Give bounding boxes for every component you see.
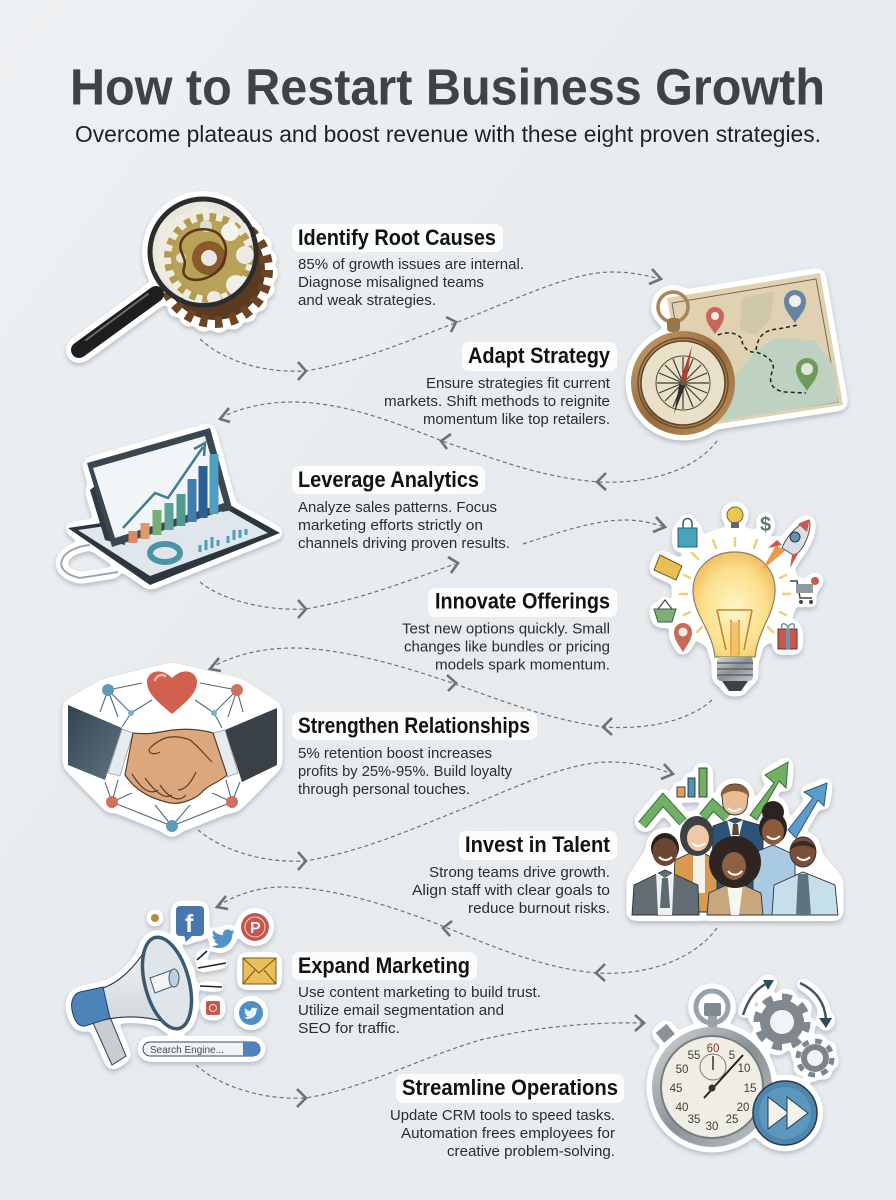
icon: location pin (674, 623, 692, 652)
icon: basket (654, 600, 676, 622)
heading and text: innovate offerings: changes like bundles or pricing (404, 638, 610, 656)
heading and text: expand marketing: Use content marketing to build trust. (298, 984, 541, 1001)
heading and text: innovate offerings: Test new options quickly. Small (402, 620, 610, 638)
heading and text: expand marketing (292, 952, 541, 1037)
icon: pinterest: P (250, 920, 261, 937)
search bar: Search Engine... (150, 1045, 224, 1056)
icon: gift (778, 624, 797, 649)
arrow: relationships to invest in talent (198, 762, 673, 870)
icon: team with growth arrows (632, 762, 838, 915)
arrow: adapt strategy to analytics (220, 402, 717, 490)
heading and text: leverage analytics: channels driving proven results. (298, 535, 510, 552)
heading and text: adapt strategy: Adapt Strategy (468, 343, 611, 368)
icon: rocket (762, 520, 810, 570)
heading and text: leverage analytics: marketing efforts strictly on (298, 517, 483, 534)
heading and text: streamline operations: Update CRM tools to speed tasks. (390, 1107, 615, 1124)
stopwatch dial numbers: 40 (676, 1102, 688, 1114)
icon: megaphone with social media (72, 906, 276, 1065)
stopwatch dial numbers: 20 (737, 1102, 749, 1114)
arrow: root causes to adapt strategy (200, 269, 661, 380)
heading and text: adapt strategy (384, 342, 617, 428)
icon: shopping cart (790, 577, 819, 604)
icon: red app badge (206, 1001, 220, 1015)
heading and text: identify root causes: and weak strategies. (298, 292, 436, 309)
icon: twitter bird (212, 929, 235, 948)
stopwatch dial numbers: 5 (729, 1050, 735, 1062)
arrow: expand marketing to streamline operations (196, 1015, 644, 1107)
heading and text: identify root causes: 85% of growth issues are internal. (298, 256, 524, 273)
heading and text: strengthen relationships (292, 712, 537, 798)
heading and text: innovate offerings (402, 588, 617, 674)
heading and text: innovate offerings: Innovate Offerings (435, 588, 610, 614)
arrow: analytics to innovate offerings (200, 517, 665, 618)
heading and text: identify root causes: Diagnose misaligned teams (298, 274, 484, 291)
heading and text: strengthen relationships: 5% retention boost increases (298, 745, 492, 762)
icon: coupon card (654, 555, 682, 580)
icon: pinterest (241, 913, 269, 941)
heading and text: strengthen relationships: through personal touches. (298, 781, 470, 798)
search bar (143, 1042, 260, 1056)
heading and text: leverage analytics: Analyze sales patterns. Focus (298, 499, 497, 516)
subtitle: Overcome plateaus and boost revenue with these eight proven strategies. (75, 121, 821, 147)
heading and text: adapt strategy: Ensure strategies fit current (426, 375, 611, 392)
stopwatch dial numbers: 10 (738, 1063, 750, 1075)
icon: small coin (151, 914, 159, 922)
heading and text: identify root causes (292, 224, 524, 309)
heading and text: streamline operations (390, 1074, 624, 1160)
stopwatch dial numbers: 60 (707, 1043, 719, 1055)
icon: stopwatch with gears and fast-forward (652, 980, 832, 1147)
icon: blue twitter badge (239, 1001, 263, 1025)
heading and text: leverage analytics (292, 466, 510, 552)
heading and text: streamline operations: creative problem-solving. (447, 1143, 615, 1160)
stopwatch dial numbers: 30 (706, 1121, 718, 1133)
heading and text: adapt strategy: momentum like top retailers. (423, 411, 610, 428)
stopwatch dial numbers (670, 1043, 756, 1133)
stopwatch dial numbers: 35 (688, 1114, 700, 1126)
heading and text: adapt strategy: markets. Shift methods to reignite (384, 393, 610, 410)
icon: dollar: $ (760, 514, 771, 536)
heading and text: invest in talent: Align staff with clear goals to (412, 882, 610, 899)
heading and text: identify root causes: Identify Root Causes (298, 225, 496, 250)
icon: email envelope (243, 958, 276, 984)
icon: compass on a map (631, 273, 843, 435)
icon: tablet with analytics charts (61, 428, 280, 585)
heading and text: invest in talent: Strong teams drive growth. (429, 864, 610, 881)
heading and text: expand marketing: Utilize email segmentation and (298, 1002, 504, 1019)
heading and text: expand marketing: Expand Marketing (298, 953, 470, 978)
icon: light bulb with business symbols (654, 507, 819, 691)
arrow: invest in talent to expand marketing (217, 887, 717, 981)
heading and text: leverage analytics: Leverage Analytics (298, 467, 479, 492)
stopwatch dial numbers: 55 (688, 1050, 700, 1062)
icon: handshake with heart and network (68, 668, 277, 832)
arrow: innovate offerings to relationships (210, 648, 712, 735)
stopwatch dial numbers: 45 (670, 1083, 682, 1095)
heading and text: invest in talent (412, 831, 617, 917)
heading and text: streamline operations: Streamline Operations (402, 1075, 618, 1100)
heading and text: strengthen relationships: profits by 25%-95%. Build loyalty (298, 763, 512, 780)
stopwatch dial numbers: 25 (726, 1114, 738, 1126)
heading and text: innovate offerings: models spark momentum. (435, 656, 610, 674)
icon: magnifying glass over rusty gear (79, 199, 267, 350)
heading and text: streamline operations: Automation frees employees for (401, 1125, 615, 1142)
icon: facebook (176, 906, 204, 942)
title: How to Restart Business Growth (70, 58, 825, 116)
heading and text: invest in talent: reduce burnout risks. (468, 900, 610, 917)
heading and text: expand marketing: SEO for traffic. (298, 1020, 400, 1037)
icon: facebook: f (185, 910, 194, 938)
heading and text: strengthen relationships: Strengthen Relationships (298, 713, 530, 738)
stopwatch dial numbers: 15 (744, 1083, 756, 1095)
icon: shopping bag (678, 518, 697, 547)
stopwatch dial numbers: 50 (676, 1064, 688, 1076)
heading and text: invest in talent: Invest in Talent (465, 832, 611, 857)
icon: small bulb (727, 507, 743, 528)
